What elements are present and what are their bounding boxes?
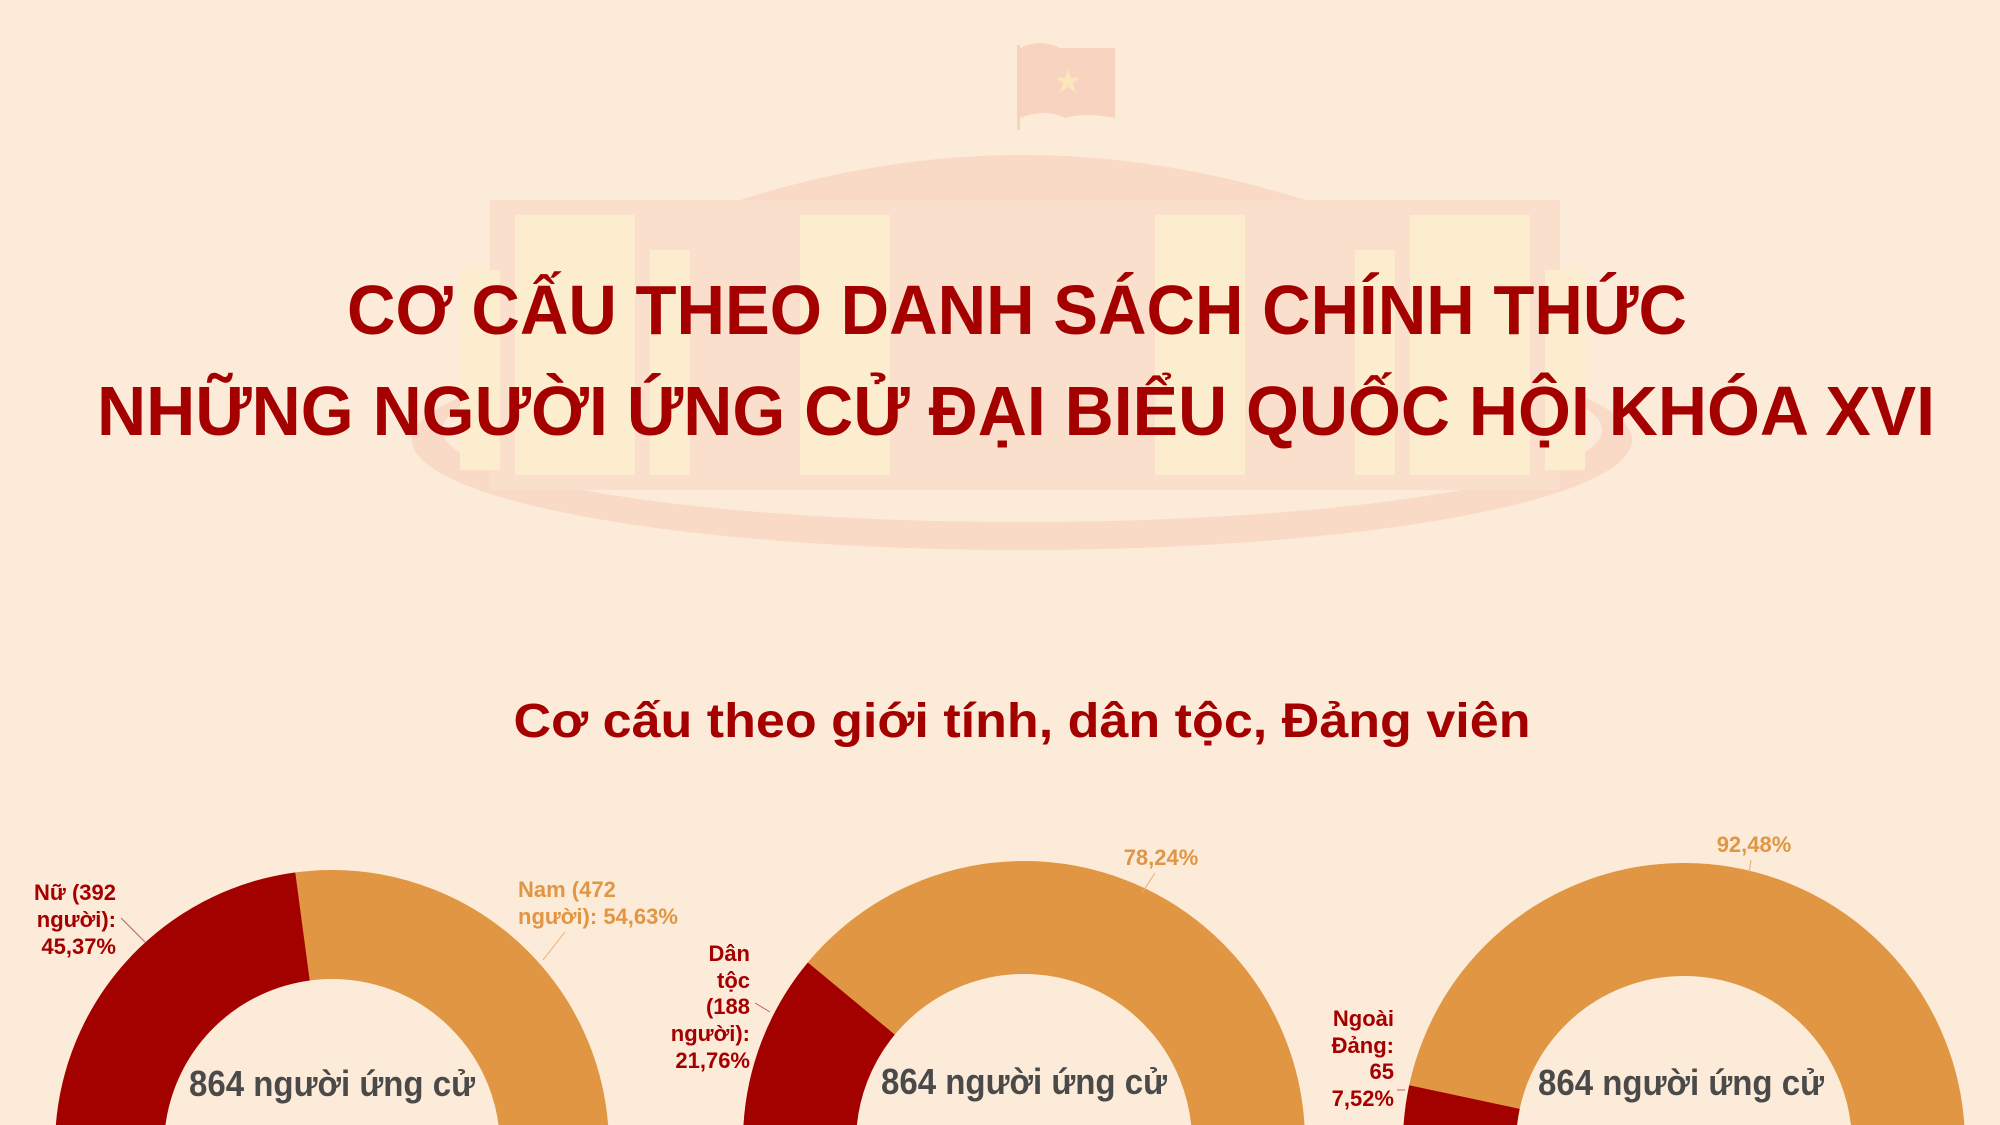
background watermark: parliament building bbox=[412, 43, 1632, 550]
donut chart: party membership: 7,52% bbox=[1332, 1086, 1394, 1111]
donut chart: gender: 45,37% bbox=[41, 934, 116, 959]
donut chart: gender: 864 người ứng cử bbox=[189, 1063, 476, 1104]
donut chart: party membership: 864 người ứng cử bbox=[1538, 1062, 1825, 1103]
donut chart: party membership bbox=[1332, 832, 1959, 1125]
donut chart: gender: Nữ (392 bbox=[34, 880, 116, 905]
donut chart: ethnicity: Dân bbox=[708, 941, 750, 966]
donut chart: ethnicity bbox=[672, 850, 1304, 1125]
donut chart: gender bbox=[34, 877, 678, 1125]
donut chart: party membership: 65 bbox=[1370, 1059, 1394, 1084]
donut chart: party membership: Ngoài bbox=[1333, 1006, 1394, 1031]
background watermark: parliament building: ★ bbox=[1054, 63, 1082, 99]
donut chart: ethnicity: 864 người ứng cử bbox=[881, 1061, 1168, 1102]
title: CƠ CẤU THEO DANH SÁCH CHÍNH THỨC bbox=[347, 271, 1687, 349]
title bbox=[97, 271, 1935, 450]
subtitle: Cơ cấu theo giới tính, dân tộc, Đảng viên bbox=[514, 695, 1530, 748]
donut chart: ethnicity: 21,76% bbox=[675, 1048, 750, 1073]
donut chart: ethnicity: tộc bbox=[717, 968, 750, 993]
donut chart: gender: Nam (472 bbox=[518, 877, 616, 902]
donut chart: ethnicity: (188 bbox=[706, 994, 750, 1019]
title: NHỮNG NGƯỜI ỨNG CỬ ĐẠI BIỂU QUỐC HỘI KHÓA XVI bbox=[97, 371, 1935, 450]
donut chart: party membership: Đảng: bbox=[1332, 1033, 1394, 1058]
donut chart: party membership: 92,48% bbox=[1717, 832, 1791, 857]
donut chart: gender: người): 54,63% bbox=[518, 904, 678, 929]
donut chart: ethnicity: người): bbox=[671, 1021, 750, 1046]
donut chart: gender: người): bbox=[37, 907, 116, 932]
donut chart: ethnicity: 78,24% bbox=[1124, 845, 1198, 870]
